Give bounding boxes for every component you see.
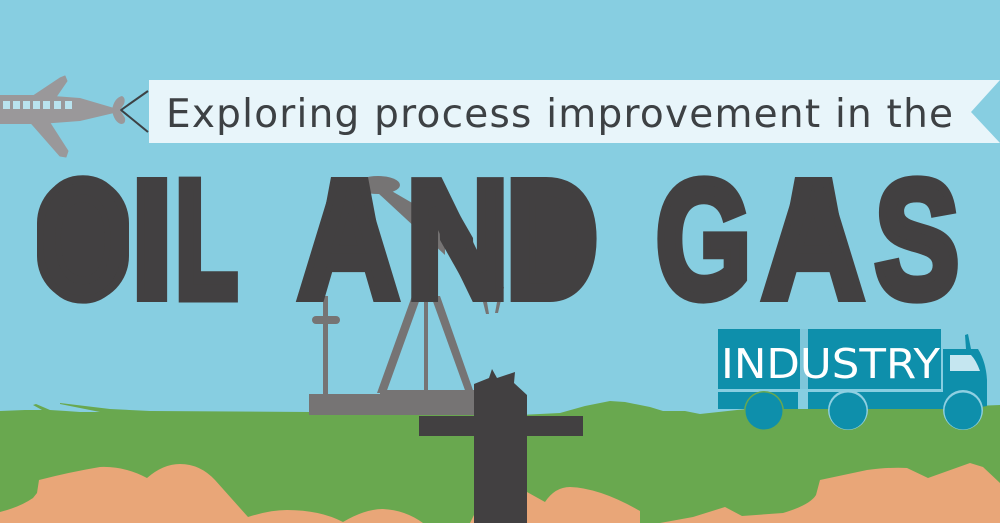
truck chassis [718,392,798,409]
pump beam [378,186,445,255]
ribbon banner [149,80,1000,143]
title text: D [505,145,599,335]
letter counter fills [37,177,849,302]
ground: soil right [660,463,1000,523]
title text: G [656,147,751,333]
aeroplane [0,76,148,157]
well head pipe [419,369,583,523]
pump base [309,394,475,415]
plane fuselage [0,95,114,124]
truck coupling [800,329,808,389]
ground: grass [0,401,1000,523]
truck mirror [965,334,971,349]
truck wheels [744,391,784,431]
truck cab [943,349,987,400]
title text: L [176,148,237,331]
plane tail [112,96,125,124]
plane wings [33,76,67,97]
truck [718,329,987,431]
plane windows [3,101,72,109]
industry label: INDUSTRY [721,340,941,388]
ground: soil left [0,464,423,523]
banner tow lines [121,91,148,132]
main title [35,143,959,335]
title text: S [875,147,959,333]
title text: A [761,145,865,335]
pump frame legs [377,296,421,393]
truck containers [718,329,800,389]
oil pump jack [309,176,504,415]
ground: soil centre [470,487,640,523]
pump horsehead [356,176,400,194]
title text: I [130,145,174,335]
subtitle: Exploring process improvement in the [166,92,953,137]
pump small links [483,302,489,314]
truck window [950,355,980,371]
title text: N [406,147,509,333]
title text: O [35,145,131,335]
pump rod and crossbar [323,296,328,396]
ribbon shape [149,80,1000,143]
title text: A [297,145,400,335]
